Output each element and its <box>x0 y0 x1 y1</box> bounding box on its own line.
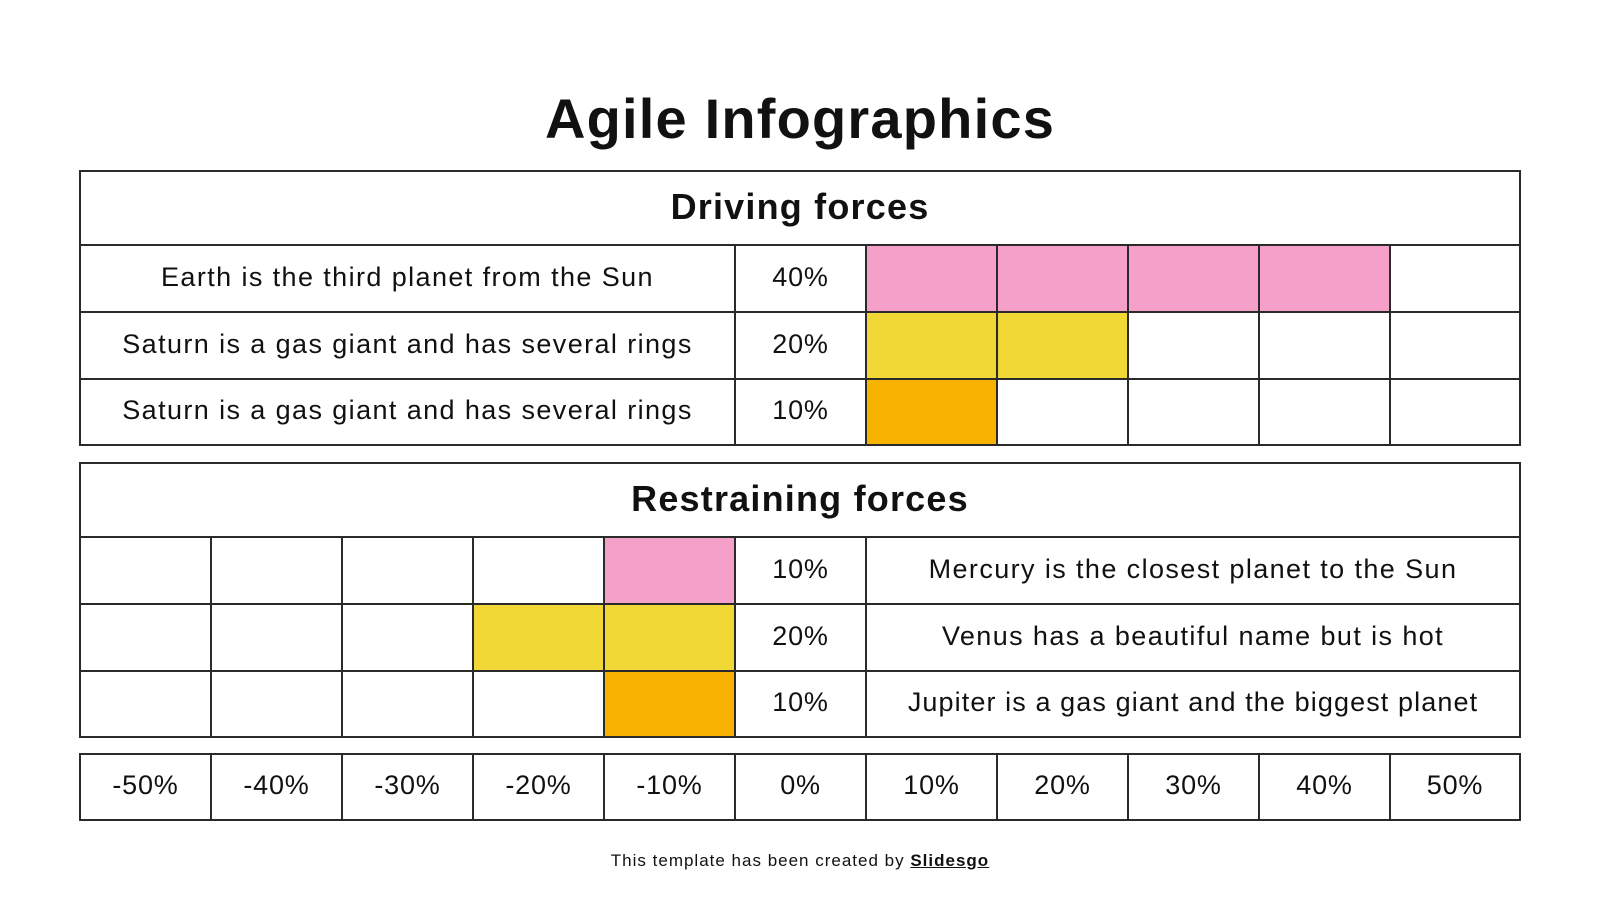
row 3 <box>79 672 1521 738</box>
row 3: Jupiter is a gas giant and the biggest planet <box>908 687 1478 717</box>
row 3 <box>79 380 1521 446</box>
axis scale: -10% <box>636 770 703 800</box>
row 3: 10% <box>772 687 829 717</box>
row 1: 10% <box>772 554 829 584</box>
row 3: 10% <box>772 395 829 425</box>
row 1 <box>79 538 1521 603</box>
row 1: Mercury is the closest planet to the Sun <box>929 554 1457 584</box>
row 2: Saturn is a gas giant and has several rings <box>122 328 693 358</box>
footer credit: This template has been created by Slidesgo <box>611 851 989 870</box>
row 2: 20% <box>772 620 829 650</box>
axis scale: -30% <box>374 770 441 800</box>
heading: driving forces: Driving forces <box>671 186 929 226</box>
row 1: Earth is the third planet from the Sun <box>161 262 654 292</box>
heading: restraining forces: Restraining forces <box>631 478 969 518</box>
axis scale: -50% <box>112 770 179 800</box>
title: Agile Infographics <box>545 87 1055 150</box>
axis scale: 0% <box>780 770 821 800</box>
row 2: Venus has a beautiful name but is hot <box>942 620 1444 650</box>
row 2: 20% <box>772 328 829 358</box>
panel: driving forces <box>79 170 1521 446</box>
panel: restraining forces <box>79 462 1521 738</box>
heading: restraining forces <box>79 462 1521 538</box>
axis scale: 10% <box>903 770 960 800</box>
row 2 <box>79 313 1521 378</box>
row 1: 40% <box>772 262 829 292</box>
axis scale: 50% <box>1427 770 1483 800</box>
row 3: Saturn is a gas giant and has several rings <box>122 395 693 425</box>
axis scale: 40% <box>1296 770 1353 800</box>
row 1 <box>79 246 1521 311</box>
axis scale <box>79 753 1521 821</box>
axis scale: 20% <box>1034 770 1091 800</box>
axis scale: 30% <box>1165 770 1222 800</box>
axis scale: -40% <box>243 770 310 800</box>
axis scale: -20% <box>505 770 572 800</box>
heading: driving forces <box>79 170 1521 246</box>
row 2 <box>79 605 1521 670</box>
